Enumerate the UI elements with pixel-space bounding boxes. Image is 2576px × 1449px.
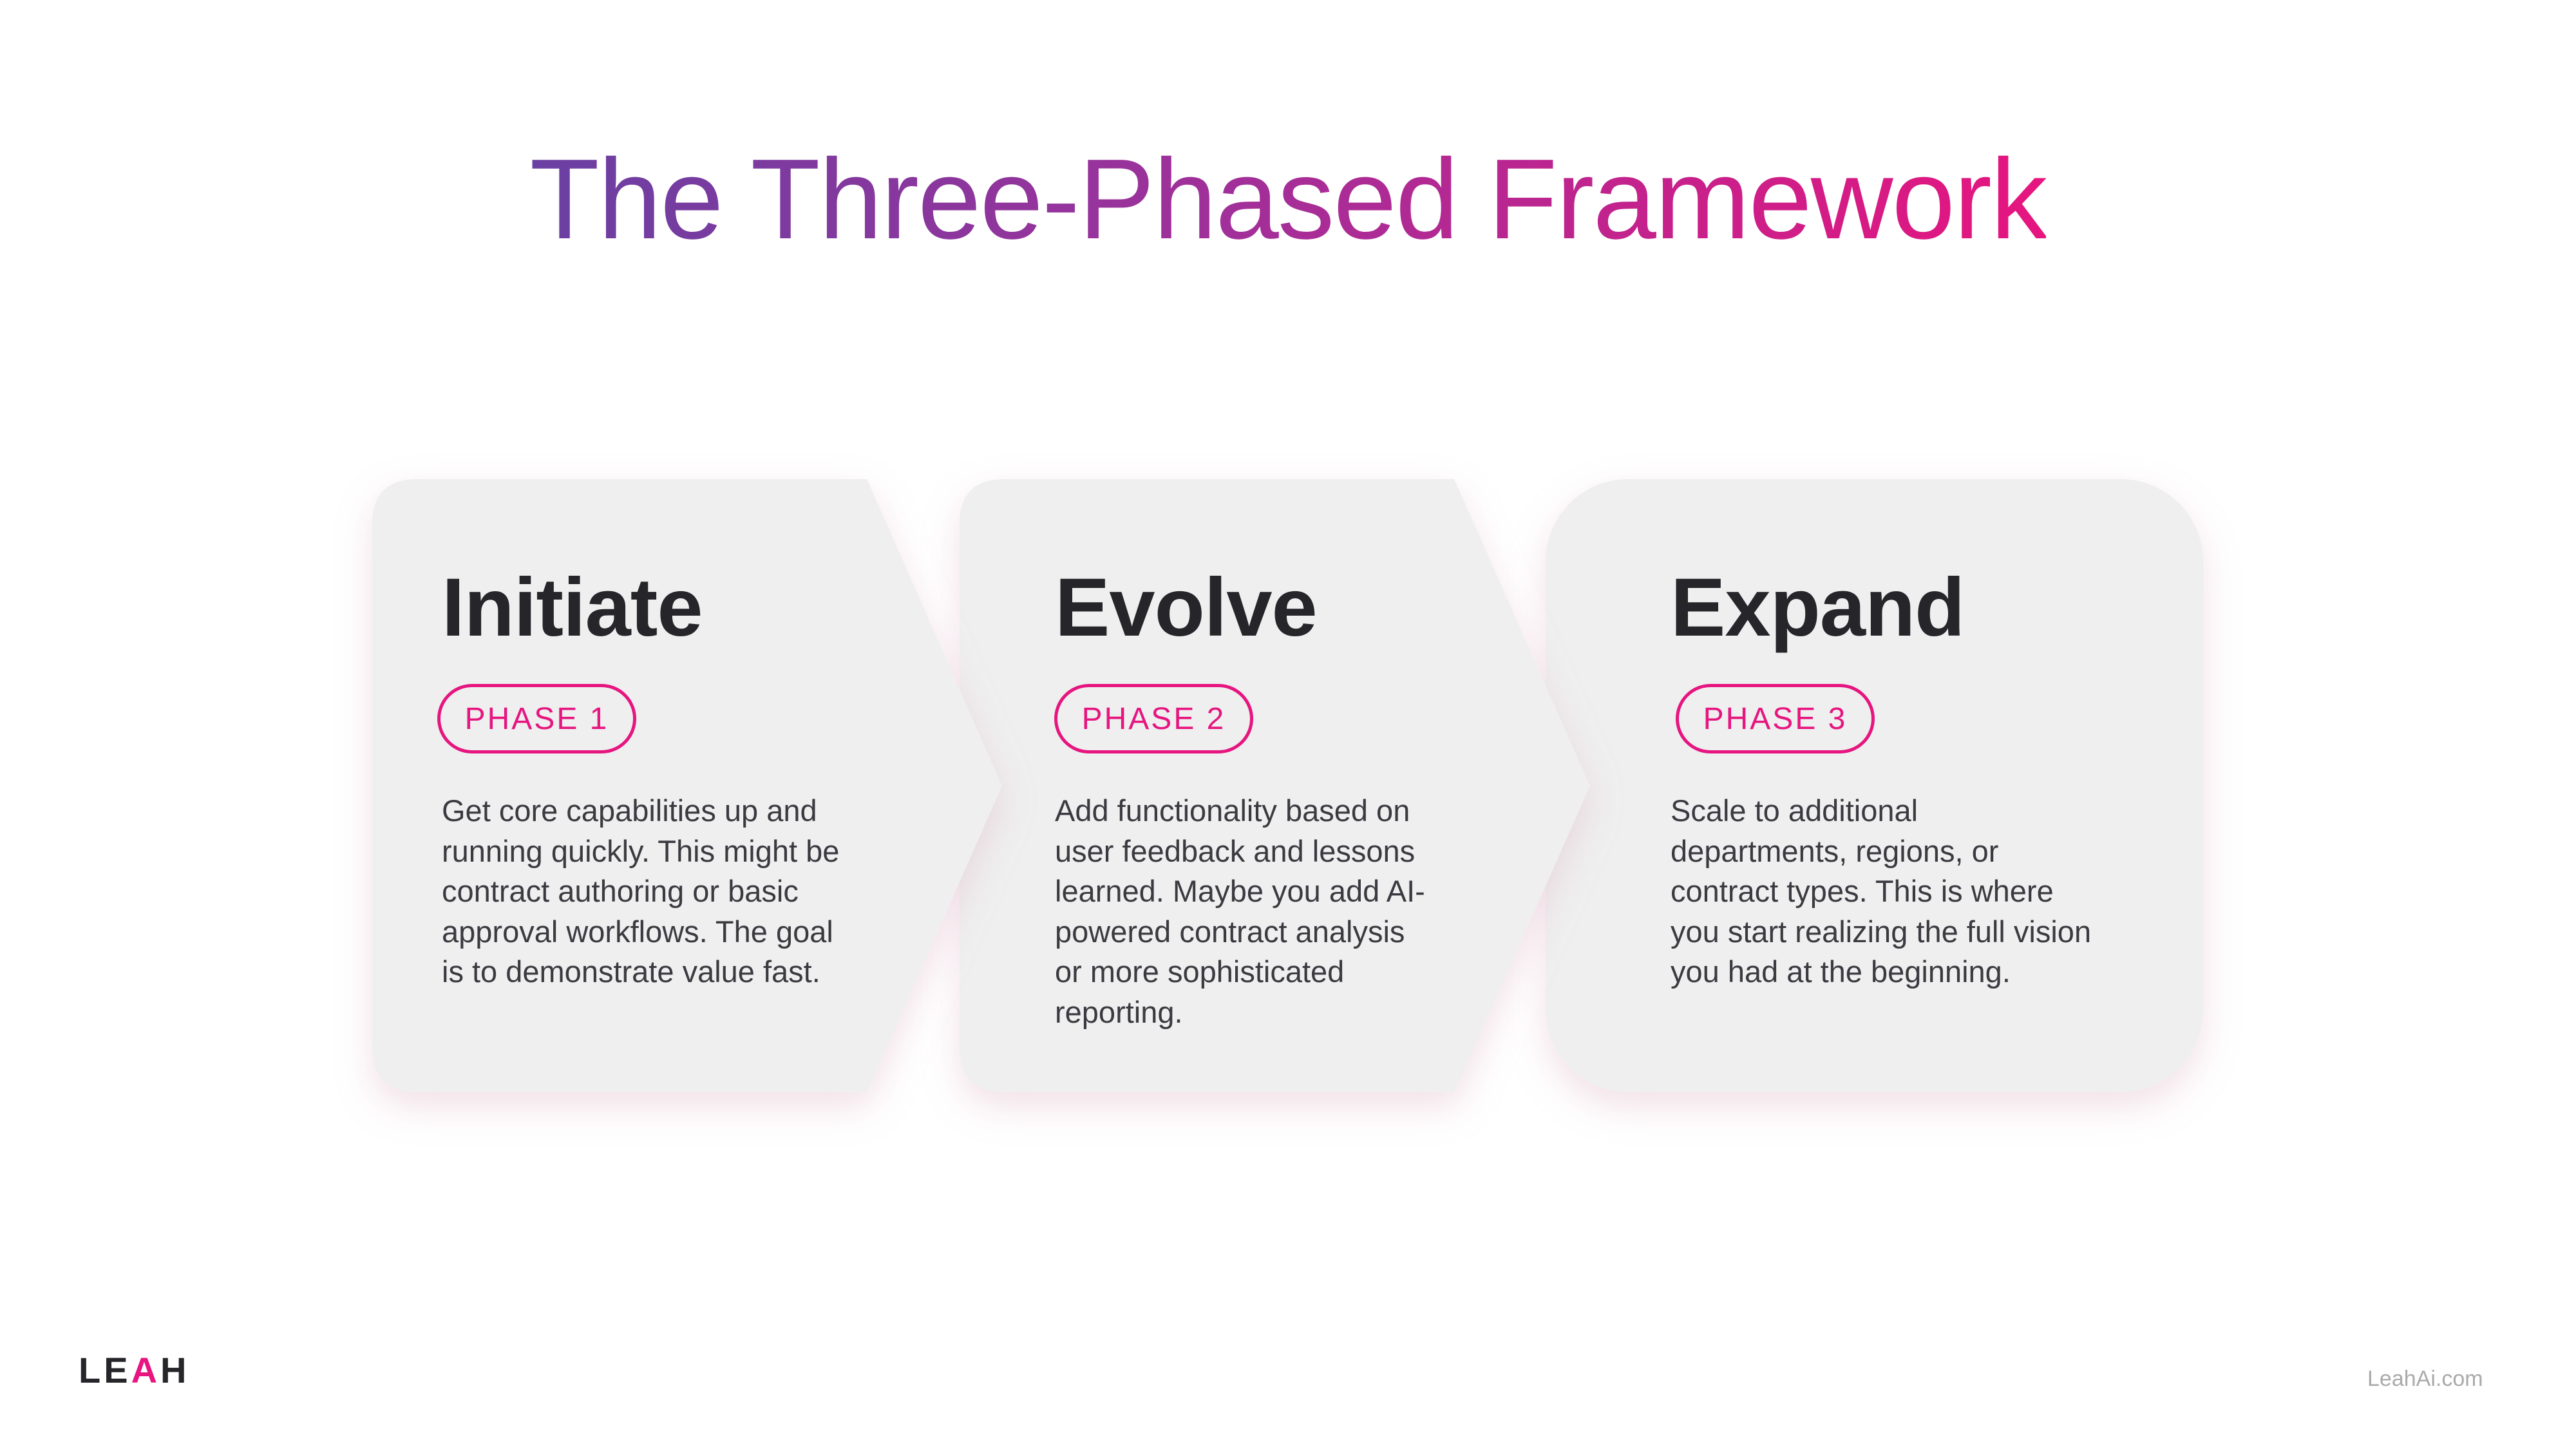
card 1 shape xyxy=(372,479,1002,1092)
title: The Three-Phased Framework xyxy=(530,135,2046,263)
text: expand description xyxy=(1671,793,2091,989)
badge: phase 3: PHASE 3 xyxy=(1703,702,1847,735)
panel: initiate xyxy=(437,562,839,989)
text: evolve description: powered contract analysis xyxy=(1055,914,1405,948)
panel: evolve xyxy=(1054,562,1425,1029)
text: evolve description: learned. Maybe you add AI- xyxy=(1055,874,1425,908)
badge: phase 1: PHASE 1 xyxy=(465,702,609,735)
badge: phase 3 xyxy=(1676,684,1875,753)
text: expand description: departments, regions, or xyxy=(1671,833,1998,868)
card 2 shape xyxy=(960,479,1590,1092)
text: evolve description: Add functionality based on xyxy=(1055,793,1410,828)
badge: phase 2 xyxy=(1054,684,1253,753)
panel: expand xyxy=(1671,562,2091,989)
text: evolve description: reporting. xyxy=(1055,994,1183,1029)
text: initiate description: Get core capabilities up and xyxy=(442,793,817,828)
heading: Evolve: Evolve xyxy=(1055,562,1317,654)
badge: phase 1 xyxy=(437,684,636,753)
text: evolve description: or more sophisticated xyxy=(1055,954,1344,989)
text: initiate description: running quickly. This might be xyxy=(442,833,839,868)
footer url: LeahAi.com xyxy=(2367,1367,2483,1391)
text: expand description: you had at the beginning. xyxy=(1671,954,2011,989)
text: expand description: Scale to additional xyxy=(1671,793,1918,828)
text: initiate description: contract authoring or basic xyxy=(442,874,799,908)
text: expand description: contract types. This is where xyxy=(1671,874,2054,908)
badge: phase 2: PHASE 2 xyxy=(1082,702,1226,735)
text: initiate description: is to demonstrate value fast. xyxy=(442,954,820,989)
heading: Expand: Expand xyxy=(1671,562,1964,654)
text: initiate description xyxy=(442,793,839,989)
text: evolve description xyxy=(1055,793,1425,1029)
text: evolve description: user feedback and lessons xyxy=(1055,833,1415,868)
heading: Initiate: Initiate xyxy=(442,562,702,654)
text: initiate description: approval workflows. The goal xyxy=(442,914,833,948)
text: expand description: you start realizing the full vision xyxy=(1671,914,2091,948)
logo: LEAH: LEAH xyxy=(79,1350,189,1390)
card 3 shape xyxy=(1546,479,2203,1092)
